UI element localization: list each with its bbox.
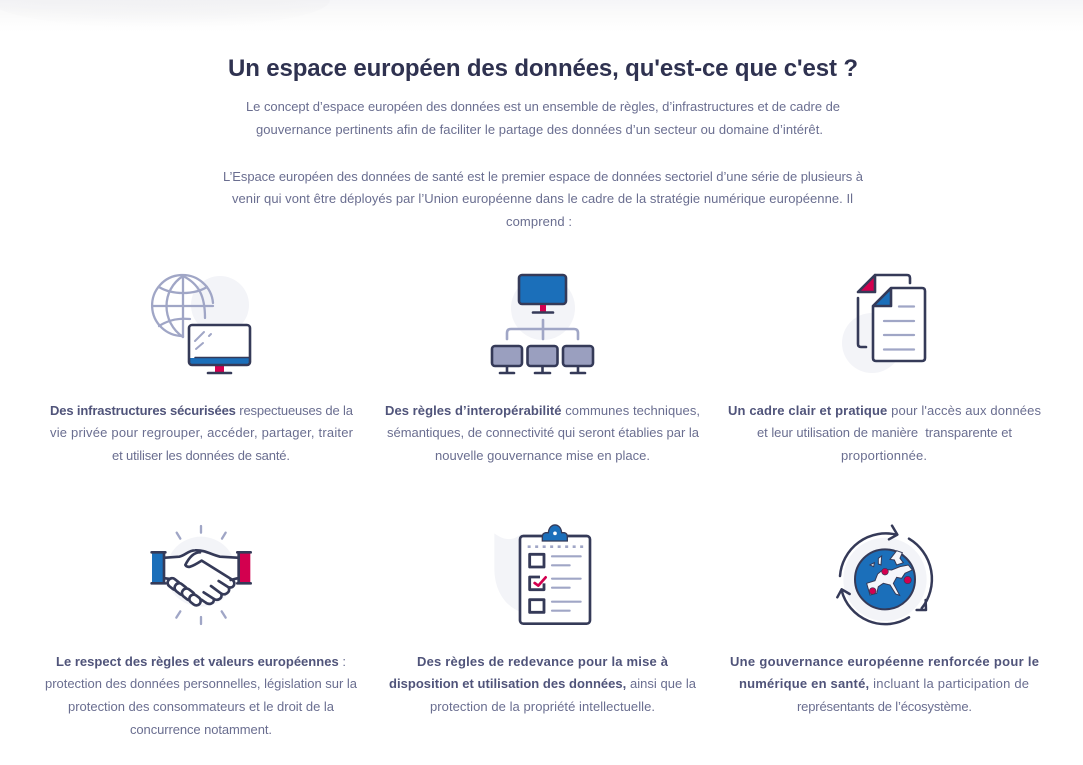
text: interoperability: Des règles d’interopérabilité communes techniques,: [385, 403, 700, 418]
text: governance: Une gouvernance européenne renforcée pour le: [730, 654, 1039, 669]
icon: clipboard checklist: [494, 525, 590, 624]
panel: fee rules: [389, 525, 697, 714]
icon: network of monitors: [492, 275, 593, 373]
text: framework: proportionnée.: [841, 448, 927, 463]
panel: governance: [730, 526, 1039, 714]
text: european values: protection des consommateurs et le droit de la: [68, 699, 335, 714]
text: framework: [728, 403, 1042, 463]
intro text block: comprend :: [506, 214, 572, 229]
text: fee rules: Des règles de redevance pour la mise à: [417, 654, 669, 669]
panel: infrastructures: [50, 275, 354, 463]
text: framework: Un cadre clair et pratique pour l'accès aux données: [728, 403, 1042, 418]
intro text block: L’Espace européen des données de santé est le premier espace de données sectoriel d’une série de plusieurs à: [223, 169, 864, 184]
text: interoperability: sémantiques, de connectivité qui seront établies par la: [387, 425, 700, 440]
text: infrastructures: et utiliser les données de santé.: [112, 448, 290, 463]
text: european values: Le respect des règles et valeurs européennes :: [56, 654, 346, 669]
text: european values: protection des données personnelles, législation sur la: [45, 676, 358, 691]
panel: interoperability: [385, 275, 700, 463]
text: governance: numérique en santé, incluant la participation de: [739, 676, 1029, 691]
text: infrastructures: [50, 403, 354, 463]
intro text block: [223, 99, 864, 229]
intro text block: venir qui vont être déployés par l’Union européenne dans le cadre de la stratégie numérique européenne. Il: [232, 191, 853, 206]
text: fee rules: protection de la propriété intellectuelle.: [430, 699, 655, 714]
text: framework: et leur utilisation de manière transparente et: [757, 425, 1012, 440]
text: european values: concurrence notamment.: [130, 722, 272, 737]
text: governance: représentants de l’écosystème.: [797, 699, 972, 714]
text: infrastructures: vie privée pour regrouper, accéder, partager, traiter: [50, 425, 354, 440]
intro text block: gouvernance pertinents afin de faciliter le partage des données d’un secteur ou domaine d’intérêt.: [256, 122, 823, 137]
icon: handshake: [152, 526, 251, 624]
panel: european values: [45, 526, 358, 737]
title: Un espace européen des données, qu'est-ce que c'est ?: [228, 55, 858, 82]
icon: globe and monitor: [152, 275, 250, 373]
text: governance: [730, 654, 1039, 714]
intro text block: Le concept d’espace européen des données est un ensemble de règles, d’infrastructures et de cadre de: [246, 99, 840, 114]
icon: Europe globe with arrows: [837, 526, 932, 624]
text: fee rules: disposition et utilisation des données, ainsi que la: [389, 676, 697, 691]
text: fee rules: [389, 654, 697, 714]
icon: documents: [842, 275, 925, 373]
text: infrastructures: Des infrastructures sécurisées respectueuses de la: [50, 403, 354, 418]
text: european values: [45, 654, 358, 737]
text: interoperability: nouvelle gouvernance mise en place.: [435, 448, 650, 463]
text: interoperability: [385, 403, 700, 463]
panel: framework: [728, 275, 1042, 463]
